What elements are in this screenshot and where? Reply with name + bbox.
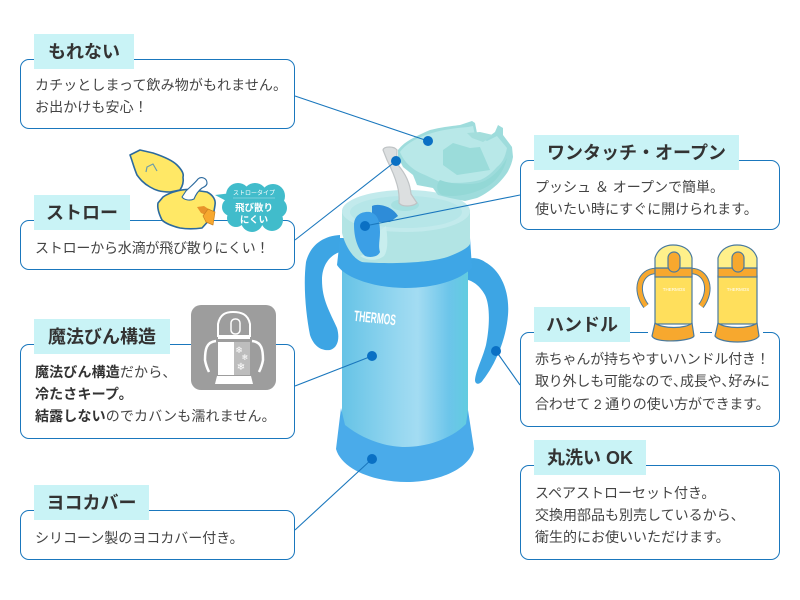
text: leak-proof [35, 77, 287, 115]
speech bubble: にくい [240, 215, 268, 226]
heading: straw: ストロー [46, 203, 118, 223]
heading: side cover [34, 485, 149, 520]
text: leak-proof: お出かけも安心！ [35, 99, 148, 115]
text: leak-proof: カチッとしまって飲み物がもれません。 [35, 77, 287, 93]
panel: vacuum structure [20, 319, 295, 439]
marker dots [360, 136, 501, 464]
yellow mug handles [640, 271, 656, 306]
text: handle [535, 351, 770, 412]
heading: vacuum structure: 魔法びん構造 [48, 327, 156, 347]
icon: vacuum bottle with snowflakes: ❄ [237, 362, 245, 373]
white halo cutting the panel border [648, 325, 700, 339]
speech bubble: ストロータイプ [233, 189, 275, 197]
mug: open lid [398, 121, 513, 201]
mug: collar ring [337, 238, 472, 288]
heading: washable [534, 440, 646, 475]
brand name: THERMOS [353, 308, 397, 329]
text: washable: 衛生的にお使いいただけます。 [535, 529, 730, 545]
mug: left handle [305, 235, 340, 350]
text: vacuum structure: 魔法びん構造だから、 [35, 364, 177, 380]
yellow mug without handles [718, 276, 757, 324]
panel: leak-proof [20, 34, 295, 129]
heading: leak-proof [34, 34, 134, 69]
mug: stainless body [342, 268, 468, 448]
text: one-touch open: 使いたい時にすぐに開けられます。 [535, 201, 758, 217]
heading: washable: 丸洗い OK [547, 448, 633, 468]
panel: handle [520, 307, 780, 427]
heading: one-touch open: ワンタッチ・オープン [547, 143, 726, 163]
text: side cover: シリコーン製のヨコカバー付き。 [35, 530, 244, 546]
heading: one-touch open [534, 135, 739, 170]
text: washable: スペアストローセット付き。 [535, 485, 715, 501]
text: one-touch open [535, 179, 758, 217]
icon: vacuum bottle with snowflakes: ❄ [242, 353, 248, 362]
mug: push button [354, 205, 398, 260]
panel: one-touch open [520, 135, 780, 230]
mug: straw [383, 147, 417, 206]
orange button [197, 206, 210, 216]
heading: handle [534, 307, 630, 342]
text: handle: 合わせて 2 通りの使い方ができます。 [535, 396, 769, 412]
text: handle: 赤ちゃんが持ちやすいハンドル付き！ [535, 351, 770, 367]
text: washable [535, 485, 745, 545]
panel: washable [520, 440, 780, 560]
yellow mug with handles [655, 276, 692, 324]
panel: side cover [20, 485, 295, 560]
heading: handle: ハンドル [546, 315, 618, 335]
straw [182, 178, 207, 200]
yellow open cap [130, 150, 183, 192]
speech bubble [215, 183, 287, 232]
yellow lid base [158, 189, 215, 229]
mug: lid base [342, 210, 470, 263]
heading: side cover: ヨコカバー [46, 493, 136, 513]
mug: right handle [455, 258, 508, 384]
text: vacuum structure: 結露しないのでカバンも濡れません。 [35, 408, 276, 424]
text: vacuum structure: 冷たさキープ。 [35, 386, 133, 402]
text: vacuum structure [35, 364, 276, 424]
heading: straw [34, 195, 130, 230]
small brand marks [663, 287, 749, 292]
text: one-touch open: プッシュ ＆ オープンで簡単。 [535, 179, 724, 195]
text: straw: ストローから水滴が飛び散りにくい！ [35, 240, 269, 256]
leader lines [295, 96, 520, 530]
text: handle: 取り外しも可能なので、成長や、好みに [535, 373, 770, 389]
speech bubble: 飛び散り [235, 202, 273, 214]
small brand marks: THERMOS [727, 287, 749, 292]
small brand marks: THERMOS [663, 287, 685, 292]
icon: vacuum bottle with snowflakes: ❄ [235, 346, 243, 356]
mug: silicone base [336, 408, 474, 482]
heading: leak-proof: もれない [48, 42, 120, 62]
heading: vacuum structure [34, 319, 170, 354]
panel: straw [20, 195, 295, 270]
text: washable: 交換用部品も別売しているから、 [535, 507, 745, 523]
